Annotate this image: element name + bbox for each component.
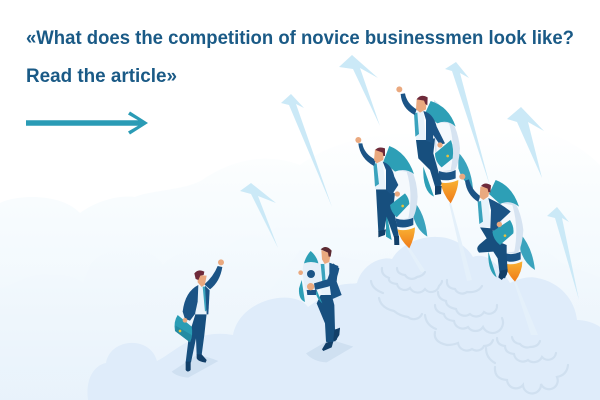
background clouds: far layer — [0, 123, 600, 400]
arrow: rising 3 — [507, 107, 544, 178]
arrow: rising 6 — [240, 183, 278, 248]
toy rocket — [299, 251, 322, 303]
arrow: rising 2 — [445, 62, 490, 186]
rocket 1 — [383, 146, 427, 248]
read the article link: Read the article» — [26, 66, 177, 87]
rocket man 3 — [459, 174, 535, 282]
rocket man 1 — [355, 137, 427, 248]
smoke trails — [407, 203, 538, 335]
shadow — [306, 339, 353, 362]
rocket 3 — [488, 180, 535, 282]
background clouds: inner layer — [0, 250, 600, 400]
title: «What does the competition of novice businessmen look like? — [26, 28, 574, 49]
background clouds: middle layer — [0, 218, 600, 400]
arrow: rising 4 — [547, 207, 579, 300]
arrow: rising 1 — [339, 55, 380, 126]
smoke swirl outlines — [371, 268, 568, 394]
rocket 2 — [423, 100, 473, 203]
rocket man 2 — [396, 86, 473, 203]
shadow — [172, 355, 218, 378]
arrow: pointing right — [26, 112, 148, 134]
figure: businessman holding rocket — [298, 247, 353, 362]
figure: businessman waving — [172, 259, 224, 378]
foreground cloud — [87, 237, 600, 400]
arrow: rising 5 — [281, 94, 332, 207]
